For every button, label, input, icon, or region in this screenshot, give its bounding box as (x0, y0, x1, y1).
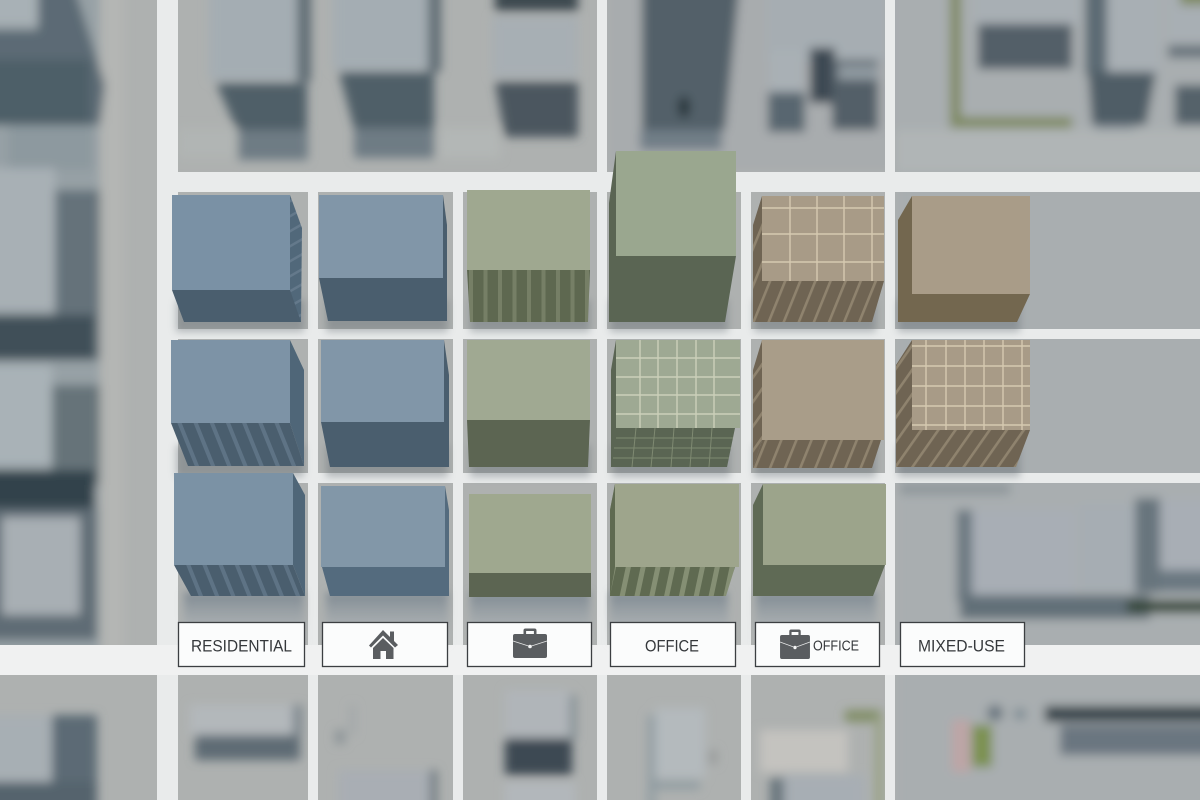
residential building 13 (174, 473, 305, 596)
label: mixed-use: MIXED-USE (918, 636, 1005, 656)
office building 17 (753, 484, 886, 596)
label: house icon (322, 622, 448, 666)
label: residential: RESIDENTIAL (191, 636, 292, 656)
mixed-use building 6 (898, 196, 1030, 322)
residential building 8 (321, 340, 449, 467)
left block (0, 0, 38, 25)
cast shadows under the bottom row (184, 592, 876, 644)
label: office: OFFICE (645, 636, 699, 656)
label: briefcase and office (756, 622, 880, 666)
label: briefcase and office: OFFICE (813, 638, 859, 654)
office building 15 (469, 494, 591, 597)
label: briefcase icon (468, 622, 592, 666)
office building 3 (467, 190, 590, 322)
label: office (610, 622, 736, 666)
tall office building 4 (609, 151, 736, 322)
residential building 7 (171, 340, 304, 466)
mixed-use building 11 (753, 340, 884, 468)
residential building 1 (172, 195, 302, 322)
office building 9 (467, 340, 590, 467)
office building 10 with window grid (611, 340, 740, 467)
middle right block (900, 484, 1010, 494)
label: mixed-use (900, 622, 1024, 666)
building ground shadows (176, 300, 1020, 477)
residential building 14 (321, 486, 449, 596)
upper right blocks (642, 0, 740, 130)
label: residential (178, 622, 304, 666)
residential building 2 (319, 195, 447, 321)
mixed-use building 5 with window grid (753, 196, 884, 322)
office building 16 (610, 484, 739, 596)
upper middle block (209, 0, 297, 80)
lower blocks (0, 715, 52, 785)
mixed-use building 12 with window grid (896, 340, 1030, 467)
